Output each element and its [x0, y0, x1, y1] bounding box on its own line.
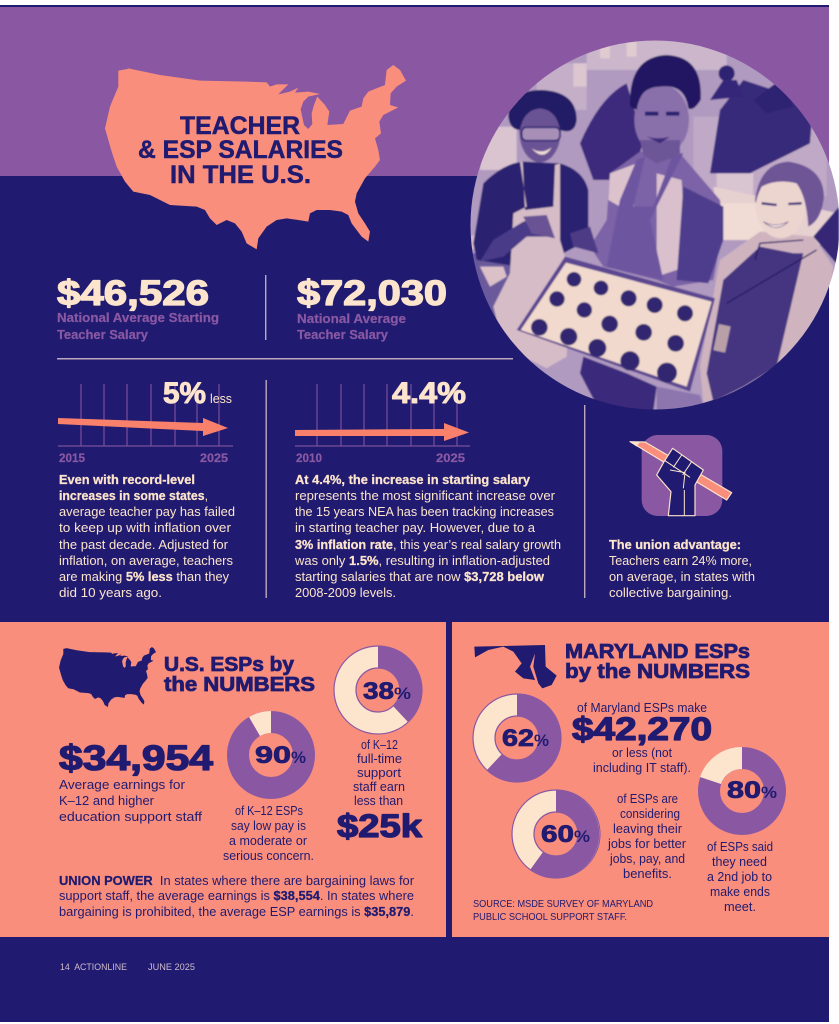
donut chart: 62%: %: [534, 731, 549, 750]
heading: [565, 641, 750, 683]
purple header band: [0, 7, 829, 176]
caption: 90%: serious concern.: [223, 849, 314, 863]
icon: raised fist holding a pencil: [630, 435, 732, 516]
heading: U.S. ESPs by: [164, 654, 295, 676]
donut chart: 38%: [334, 646, 422, 734]
caption: 60%: [607, 792, 686, 881]
map: Maryland silhouette: [474, 645, 557, 688]
caption: 80%: make ends: [710, 885, 770, 899]
stat: average ESP earnings: [59, 739, 214, 824]
heading: [164, 654, 315, 696]
right woman: [700, 232, 833, 403]
text block: starting salary increase: [294, 473, 561, 600]
donut chart: 80%: [700, 747, 777, 824]
chart: 4.4%, 2010 to 2025: 4.4%: [392, 377, 466, 410]
donut chart: 60%: 60: [541, 821, 574, 848]
footer: 14 ACTIONLINE: [60, 962, 127, 972]
text block: the union advantage: on average, in states with: [609, 570, 755, 584]
left person: [473, 162, 588, 273]
donut chart: 38%: %: [394, 684, 411, 703]
caption: 38%: less than: [354, 794, 403, 808]
text block: inflation and average pay: are making 5% less than they: [59, 570, 230, 584]
stat: average ESP earnings: $34,954: [59, 739, 214, 778]
caption: 90%: of K–12 ESPs: [235, 804, 303, 818]
caption: 80%: meet.: [724, 900, 756, 914]
text block: union power: [59, 874, 414, 919]
footer: [60, 962, 195, 972]
panel: Maryland ESPs by the numbers: [452, 622, 829, 937]
donut chart: 90%: 90: [255, 742, 291, 769]
photo: students and staff holding a cookie tray: [460, 30, 839, 420]
map: continental United States: [105, 65, 406, 249]
source note: SOURCE: MSDE SURVEY OF MARYLAND: [473, 899, 653, 910]
stat: $42,270: including IT staff).: [593, 761, 691, 775]
text block: the union advantage: Teachers earn 24% more,: [609, 554, 752, 568]
caption: 80%: a 2nd job to: [707, 870, 772, 884]
chart: 5% less, 2015 to 2025: [58, 377, 233, 465]
text block: union power: bargaining is prohibited, the average ESP earnings is $35,879.: [59, 905, 414, 919]
footer: JUNE 2025: [148, 962, 195, 972]
stat: $42,270: [572, 701, 712, 775]
title: IN THE U.S.: [170, 161, 311, 189]
text block: inflation and average pay: inflation, on average, teachers: [59, 554, 233, 568]
caption: 90%: [223, 804, 314, 863]
stat: average salary: $72,030: [297, 274, 447, 313]
stat: starting salary: National Average Starting: [57, 311, 219, 325]
chart: 5% less, 2015 to 2025: 2015: [59, 453, 86, 465]
text block: starting salary increase: the 15 years NEA has been tracking increases: [295, 505, 554, 519]
caption: 38%: [337, 738, 422, 844]
title: TEACHER: [180, 112, 300, 140]
donut chart: 90%: [238, 711, 306, 788]
stat: average salary: [297, 274, 447, 342]
text block: the union advantage: The union advantage:: [609, 538, 741, 552]
stat: starting salary: $46,526: [57, 274, 209, 313]
text block: starting salary increase: At 4.4%, the increase in starting salary: [295, 473, 530, 487]
donut chart: 62%: 62: [502, 725, 534, 752]
text block: starting salary increase: 3% inflation rate, this year’s real salary growth: [295, 538, 561, 552]
chart: 5% less, 2015 to 2025: less: [210, 392, 232, 406]
text block: the union advantage: [609, 538, 755, 600]
text block: inflation and average pay: to keep up with inflation over: [59, 521, 231, 535]
donut chart: 62%: [473, 694, 561, 782]
caption: 38%: staff earn: [353, 780, 405, 794]
source note: [473, 899, 653, 923]
panel: U.S. ESPs by the numbers: [0, 622, 446, 937]
caption: 90%: say low pay is: [231, 819, 306, 833]
caption: 90%: a moderate or: [229, 834, 307, 848]
caption: 60%: leaving their: [613, 822, 682, 836]
caption: 38%: of K–12: [361, 738, 398, 752]
donut chart: 60%: %: [574, 827, 590, 846]
donut chart: 80%: %: [761, 783, 777, 802]
caption: 60%: jobs for better: [607, 837, 686, 851]
stat: $42,270: of Maryland ESPs make: [577, 701, 707, 715]
donut chart: 80%: 80: [727, 777, 761, 804]
caption: 38%: $25k: [337, 808, 422, 844]
map: small United States silhouette: [59, 647, 156, 707]
text block: starting salary increase: starting salaries that are now $3,728 below: [295, 570, 544, 584]
caption: 60%: of ESPs are: [617, 792, 678, 806]
chart: 5% less, 2015 to 2025: 2025: [200, 453, 229, 465]
chart: 5% less, 2015 to 2025: 5%: [163, 377, 206, 410]
chart: 4.4%, 2010 to 2025: [295, 377, 470, 465]
text block: starting salary increase: in starting teacher pay. However, due to a: [295, 521, 535, 535]
text block: union power: support staff, the average earnings is $38,554. In states where: [59, 889, 414, 903]
text block: inflation and average pay: average teacher pay has failed: [59, 505, 235, 519]
stat: average salary: National Average: [297, 312, 406, 326]
title: [138, 112, 343, 189]
text block: union power: UNION POWER In states where there are bargaining laws for: [59, 874, 414, 888]
caption: 38%: support: [357, 766, 402, 780]
cookie tray: [580, 357, 657, 412]
chart: 4.4%, 2010 to 2025: 2025: [436, 453, 466, 465]
caption: 80%: of ESPs said: [707, 840, 773, 854]
caption: 80%: they need: [712, 855, 767, 869]
stat: average salary: Teacher Salary: [297, 328, 388, 342]
text block: inflation and average pay: Even with record-level: [59, 473, 195, 487]
middle person: [590, 152, 723, 287]
caption: 60%: jobs, pay, and: [609, 852, 685, 866]
stat: $42,270: or less (not: [612, 746, 672, 760]
source note: PUBLIC SCHOOL SUPPORT STAFF.: [473, 912, 627, 923]
stat: $42,270: $42,270: [572, 711, 712, 747]
stat: average ESP earnings: K–12 and higher: [59, 794, 154, 808]
caption: 60%: considering: [620, 807, 680, 821]
text block: inflation and average pay: did 10 years ago.: [59, 586, 162, 600]
caption: 80%: [707, 840, 773, 914]
text block: inflation and average pay: increases in some states,: [59, 489, 208, 503]
heading: MARYLAND ESPs: [565, 641, 750, 663]
text block: inflation and average pay: [59, 473, 235, 600]
title: & ESP SALARIES: [138, 136, 343, 164]
text block: starting salary increase: represents the most significant increase over: [295, 489, 555, 503]
heading: by the NUMBERS: [565, 661, 750, 683]
donut chart: 60%: [512, 790, 600, 878]
stat: starting salary: [57, 274, 219, 342]
text block: inflation and average pay: the past decade. Adjusted for: [59, 538, 228, 552]
donut chart: 38%: 38: [363, 678, 394, 705]
caption: 60%: benefits.: [623, 867, 672, 881]
stat: average ESP earnings: Average earnings for: [59, 778, 185, 792]
text block: starting salary increase: was only 1.5%, resulting in inflation-adjusted: [294, 554, 550, 568]
heading: the NUMBERS: [164, 674, 315, 696]
chart: 4.4%, 2010 to 2025: 2010: [296, 453, 322, 465]
stat: average ESP earnings: education support staff: [59, 810, 203, 824]
stat: starting salary: Teacher Salary: [57, 328, 148, 342]
text block: the union advantage: collective bargaining.: [609, 586, 732, 600]
caption: 38%: full-time: [357, 752, 402, 766]
text block: starting salary increase: 2008-2009 levels.: [295, 586, 396, 600]
donut chart: 90%: %: [291, 748, 306, 767]
